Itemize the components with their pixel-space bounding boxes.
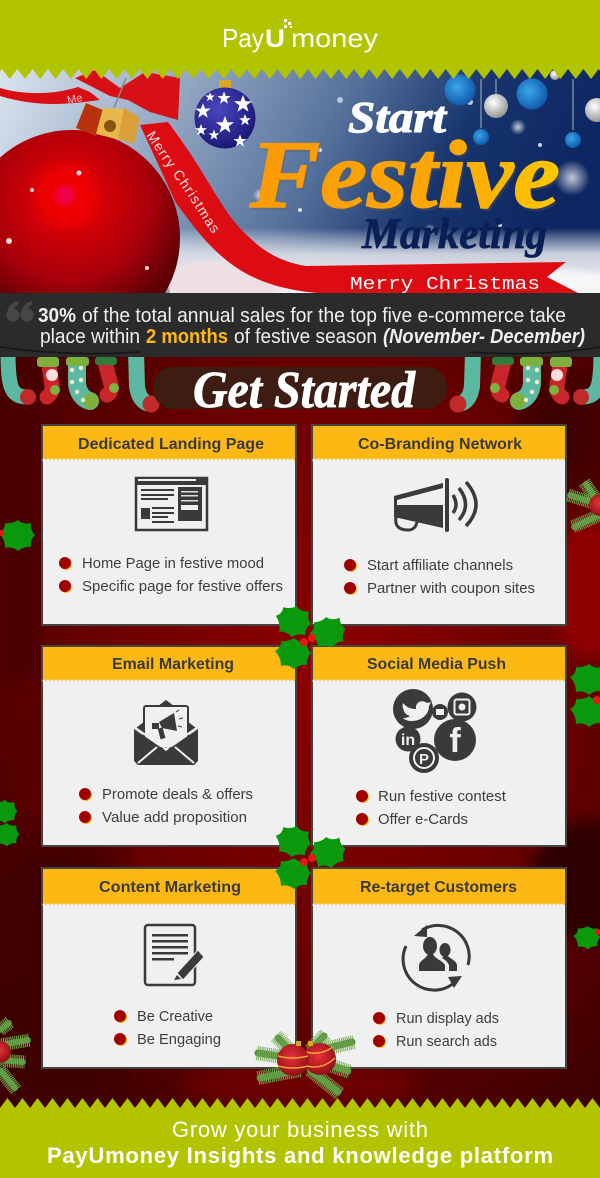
logo bbox=[222, 19, 378, 53]
gold cap bbox=[76, 78, 140, 144]
page background bbox=[0, 350, 600, 1110]
stat text: 2 months bbox=[146, 326, 228, 348]
panel: email marketing bbox=[42, 646, 296, 846]
panel: content marketing bbox=[42, 868, 296, 1068]
heading: Dedicated Landing Page bbox=[78, 436, 264, 453]
stat text bbox=[38, 305, 585, 348]
bullet list: Run search ads bbox=[396, 1033, 497, 1050]
ribbon top-left and bow bbox=[0, 70, 180, 120]
ribbon long bbox=[140, 122, 578, 294]
red ball bbox=[0, 130, 180, 346]
bullet list: Offer e-Cards bbox=[378, 811, 468, 828]
panel: social media push bbox=[312, 646, 566, 846]
hanging ornaments bbox=[444, 70, 600, 148]
icon: social network bubbles: f bbox=[449, 722, 461, 760]
heading: Social Media Push bbox=[367, 656, 506, 673]
pine and baubles center bbox=[256, 1034, 354, 1094]
ribbon text: Merry Christmas bbox=[146, 130, 218, 233]
glow spots bbox=[253, 97, 590, 236]
pine and bauble right bbox=[568, 482, 600, 527]
bullet list bbox=[356, 788, 507, 828]
bullet list: Be Engaging bbox=[137, 1031, 221, 1048]
snow ground bbox=[165, 228, 600, 304]
title: Start: Start bbox=[348, 93, 448, 142]
holly right lower bbox=[574, 926, 600, 949]
icon: social network bubbles bbox=[393, 689, 476, 773]
icon: web page bbox=[136, 477, 208, 530]
bullet list: Run display ads bbox=[396, 1010, 499, 1027]
heading: Co-Branding Network bbox=[358, 436, 522, 453]
icon: retarget arrows and people bbox=[403, 925, 469, 990]
holly right upper bbox=[570, 664, 600, 727]
holly center middle bbox=[273, 823, 348, 889]
bullet list: Promote deals & offers bbox=[102, 786, 253, 803]
heading: Email Marketing bbox=[112, 656, 234, 673]
bullet list: Be Creative bbox=[137, 1008, 213, 1025]
bullet list bbox=[373, 1010, 499, 1050]
ribbon text bbox=[66, 92, 540, 295]
icon: document and pencil bbox=[145, 925, 204, 985]
bullet list: Specific page for festive offers bbox=[82, 578, 283, 595]
bullet list: Run festive contest bbox=[378, 788, 507, 805]
quote mark bbox=[6, 301, 34, 322]
quote band bbox=[0, 293, 600, 357]
panel: dedicated landing page bbox=[42, 425, 296, 625]
ribbon text: Me bbox=[66, 92, 84, 107]
title: Marketing: Marketing bbox=[361, 211, 547, 258]
holly left upper bbox=[0, 520, 35, 551]
stat text: (November- December) bbox=[383, 326, 585, 348]
hero banner bbox=[0, 69, 600, 295]
heading: Content Marketing bbox=[99, 879, 241, 896]
bullet list: Value add proposition bbox=[102, 809, 247, 826]
blue star ornament bbox=[194, 80, 256, 148]
panel: co-branding network bbox=[312, 425, 566, 625]
footer line 2: PayUmoney Insights and knowledge platform bbox=[47, 1143, 553, 1168]
bullet list: Start affiliate channels bbox=[367, 557, 513, 574]
icon: megaphone bbox=[394, 478, 476, 532]
stat text: of festive season bbox=[234, 326, 377, 348]
stat text: place within bbox=[40, 326, 140, 348]
stockings left bbox=[8, 350, 160, 412]
logo: money bbox=[291, 23, 378, 53]
bullet list bbox=[59, 555, 283, 595]
footer line 1: Grow your business with bbox=[172, 1117, 428, 1142]
bullet list: Home Page in festive mood bbox=[82, 555, 264, 572]
icon: social network bubbles: in bbox=[401, 732, 415, 749]
icon: envelope with megaphone bbox=[134, 700, 198, 765]
ribbon text: Merry Christmas bbox=[350, 275, 540, 295]
panel: re-target customers bbox=[312, 868, 566, 1068]
get started heading: Get Started bbox=[193, 362, 416, 419]
title: Festive: Festive bbox=[251, 124, 562, 231]
holly center top bbox=[273, 603, 348, 669]
holly left lower bbox=[0, 800, 20, 846]
heading: Re-target Customers bbox=[360, 879, 517, 896]
title: Festive: Festive bbox=[249, 121, 560, 228]
stat text: 30% bbox=[38, 305, 76, 327]
bullet list bbox=[344, 557, 535, 597]
pine and bauble left bbox=[0, 1022, 30, 1090]
bullet list bbox=[114, 1008, 221, 1048]
stockings right bbox=[450, 350, 600, 412]
stat text: of the total annual sales for the top five e-commerce take bbox=[82, 305, 566, 327]
header bar with logo bbox=[0, 0, 600, 79]
footer bbox=[0, 1098, 600, 1178]
bullet list bbox=[79, 786, 253, 826]
icon: social network bubbles: P bbox=[419, 751, 429, 768]
logo: Pay bbox=[222, 23, 264, 53]
bullet list: Partner with coupon sites bbox=[367, 580, 535, 597]
logo: U bbox=[265, 25, 285, 53]
